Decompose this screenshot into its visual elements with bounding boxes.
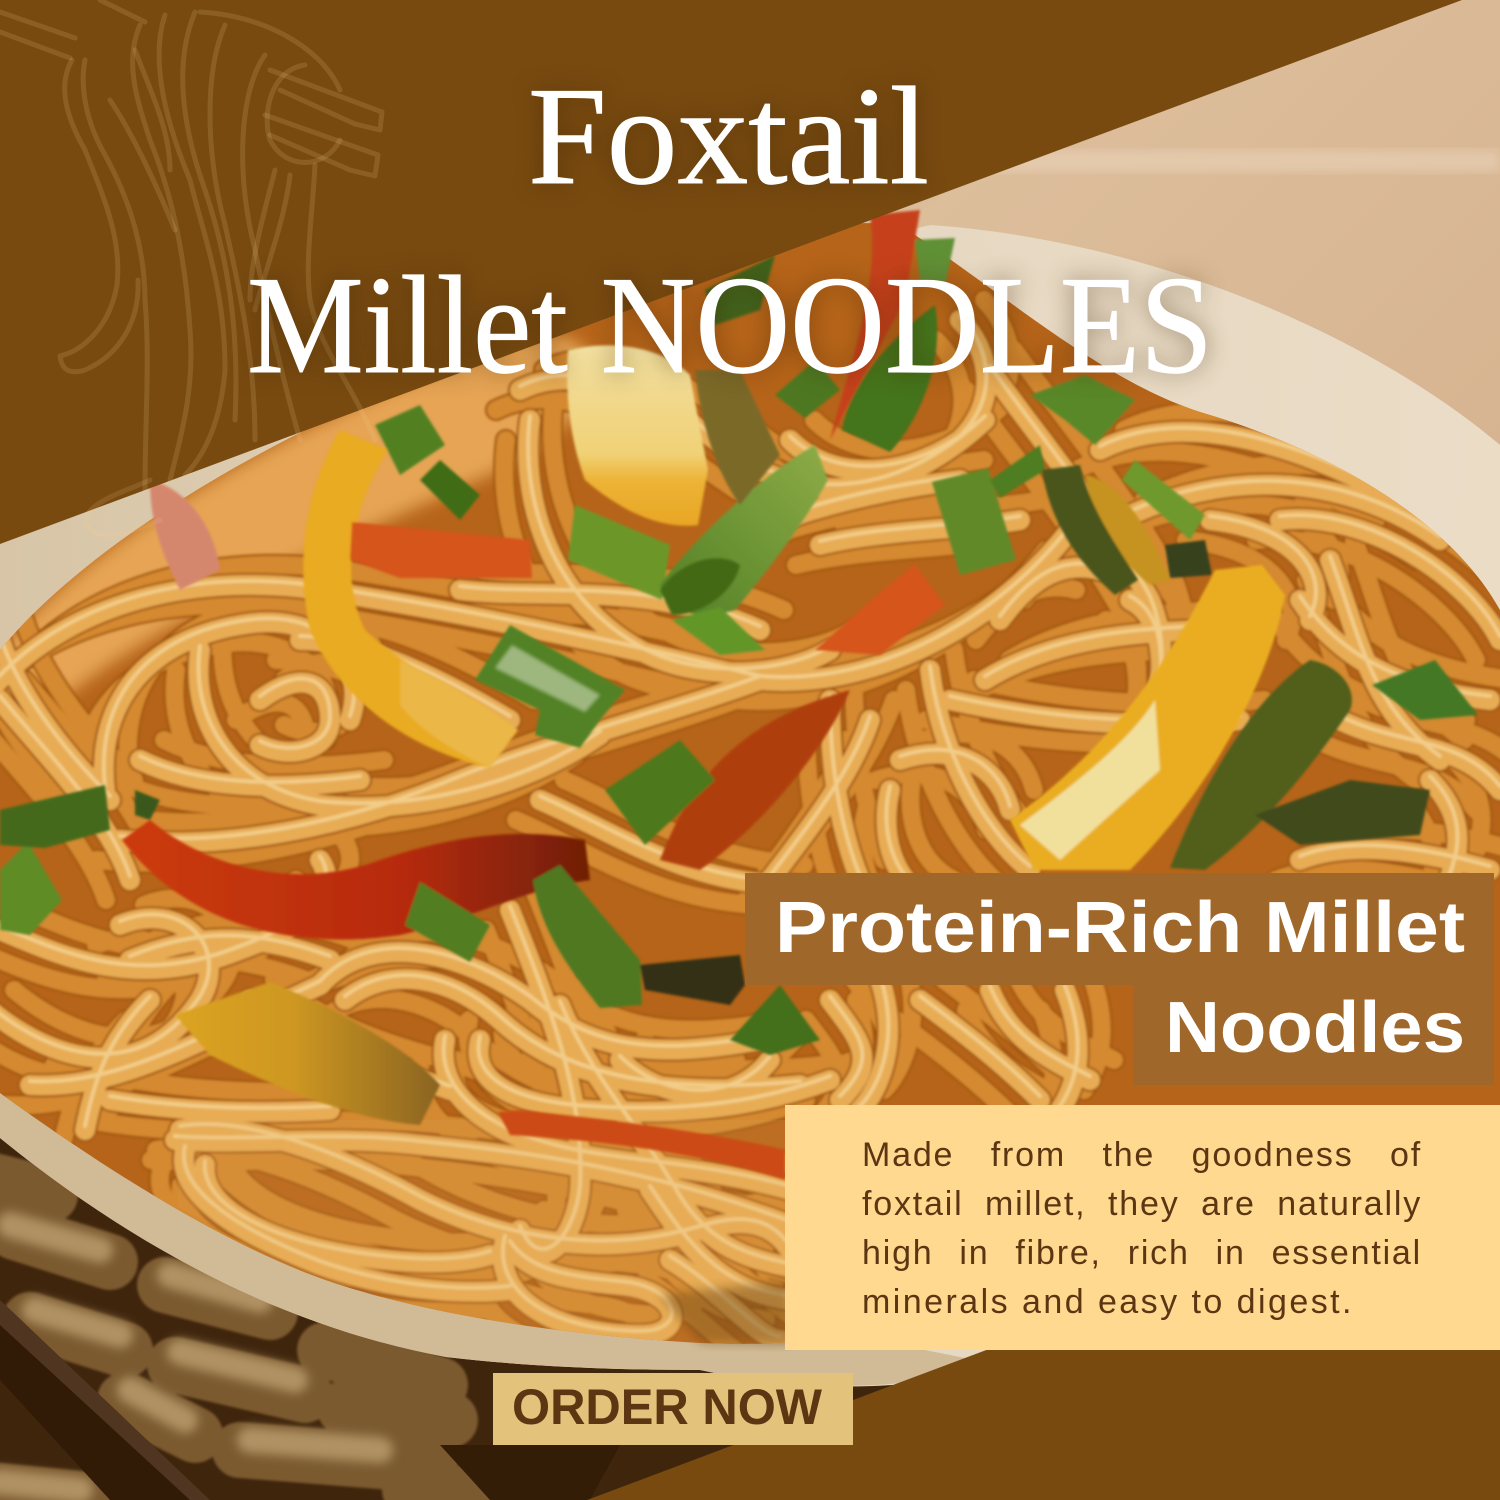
description text	[862, 1136, 1422, 1321]
noodle strands	[0, 300, 1500, 1360]
description text: minerals and easy to digest.	[862, 1283, 1354, 1321]
woven mat	[0, 1100, 990, 1500]
red pepper pieces	[122, 210, 945, 1180]
subheading line 1: Protein-Rich Millet	[775, 888, 1465, 968]
order now button	[493, 1373, 853, 1445]
description text: high in fibre, rich in essential	[862, 1234, 1422, 1272]
bottom brown diagonal panel	[587, 1157, 1500, 1500]
description text: foxtail millet, they are naturally	[862, 1185, 1422, 1223]
title	[247, 59, 1213, 403]
green onions	[0, 238, 1205, 1055]
description text: Made from the goodness of	[862, 1136, 1422, 1174]
icon: noodles on chopsticks	[0, 0, 382, 535]
subheading line 2: Noodles	[1165, 988, 1465, 1068]
dark scallion leaves	[640, 370, 1478, 1005]
description panel	[785, 1105, 1500, 1350]
bowl	[0, 225, 1500, 1386]
title line 1: Foxtail	[528, 59, 929, 214]
subheading panel	[745, 873, 1494, 1085]
title line 2: Millet NOODLES	[247, 248, 1213, 403]
yellow pepper pieces	[175, 345, 1285, 1125]
top brown diagonal panel	[0, 0, 1462, 544]
vegetables	[0, 210, 1478, 1180]
noodle mass	[0, 223, 1500, 1344]
order now button: ORDER NOW	[512, 1379, 823, 1435]
